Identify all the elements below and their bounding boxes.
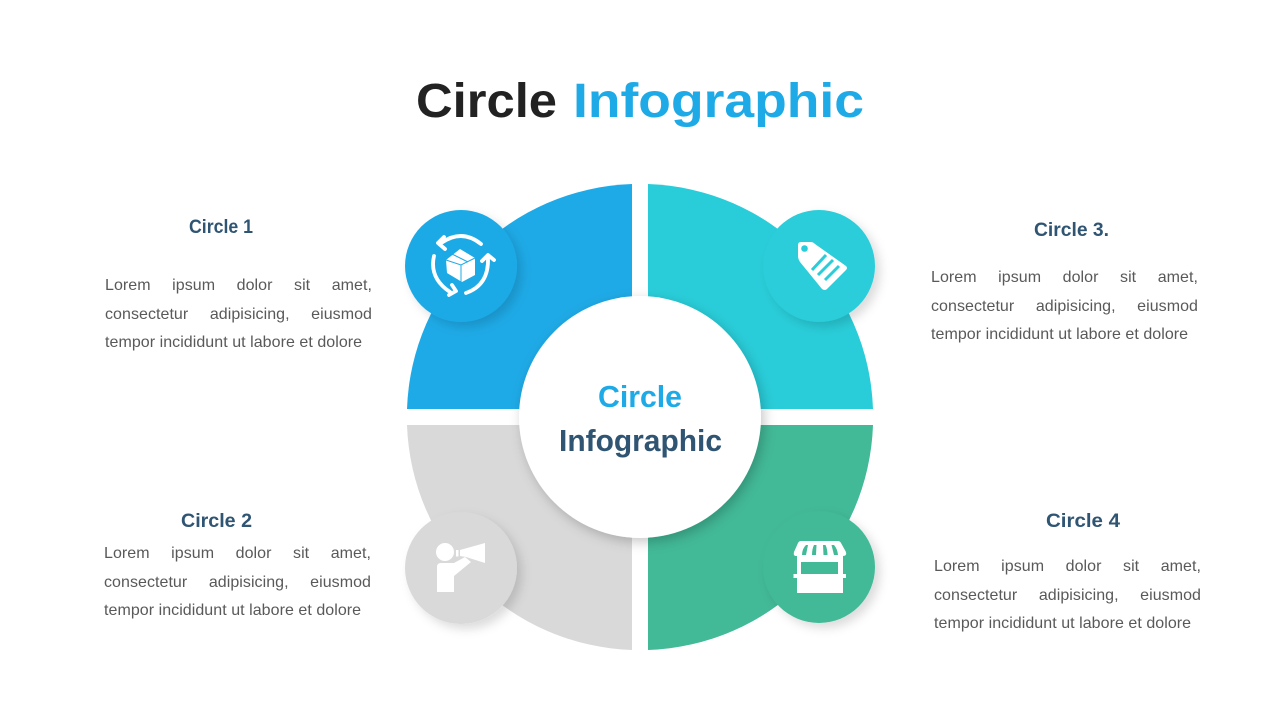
text: Circle 2 body: tempor incididunt ut labore et dolore — [104, 602, 361, 619]
center label — [559, 379, 722, 458]
icon badge: person with megaphone — [405, 512, 517, 624]
quadrant: top left blue — [407, 184, 632, 409]
icon badge: market stall — [763, 511, 875, 623]
text: Circle 2 body — [104, 545, 371, 619]
title: Circle — [416, 75, 557, 128]
quadrant: bottom left grey — [407, 425, 632, 650]
heading: Circle 3: Circle 3. — [1034, 220, 1109, 241]
heading: Circle 2: Circle 2 — [181, 511, 252, 532]
text: Circle 4 body — [934, 558, 1201, 632]
text: Circle 2 body: Lorem ipsum dolor sit amet, — [104, 545, 371, 562]
text: Circle 4 body: tempor incididunt ut labore et dolore — [934, 615, 1191, 632]
text: Circle 3 body: tempor incididunt ut labore et dolore — [931, 326, 1188, 343]
text: Circle 1 body: tempor incididunt ut labore et dolore — [105, 334, 362, 351]
text: Circle 3 body: Lorem ipsum dolor sit amet, — [931, 269, 1198, 286]
text: Circle 1 body — [105, 277, 372, 351]
title: Infographic — [573, 75, 864, 128]
text: Circle 3 body — [931, 269, 1198, 343]
icon badge: box with arrows — [405, 210, 517, 322]
title — [416, 75, 864, 128]
heading: Circle 4: Circle 4 — [1046, 511, 1120, 532]
center circle — [519, 296, 761, 538]
quadrant: bottom right green — [648, 425, 873, 650]
heading: Circle 1: Circle 1 — [189, 217, 253, 238]
quadrant: top right teal — [648, 184, 873, 409]
center label: Circle — [598, 379, 682, 414]
text: Circle 1 body: consectetur adipisicing, eiusmod — [105, 306, 372, 322]
center label: Infographic — [559, 423, 722, 458]
text: Circle 1 body: Lorem ipsum dolor sit amet, — [105, 277, 372, 294]
text: Circle 2 body: consectetur adipisicing, eiusmod — [104, 574, 371, 590]
text: Circle 4 body: Lorem ipsum dolor sit amet, — [934, 558, 1201, 575]
text: Circle 4 body: consectetur adipisicing, eiusmod — [934, 586, 1201, 604]
text: Circle 3 body: consectetur adipisicing, eiusmod — [931, 298, 1198, 314]
icon badge: price tag — [763, 210, 875, 322]
